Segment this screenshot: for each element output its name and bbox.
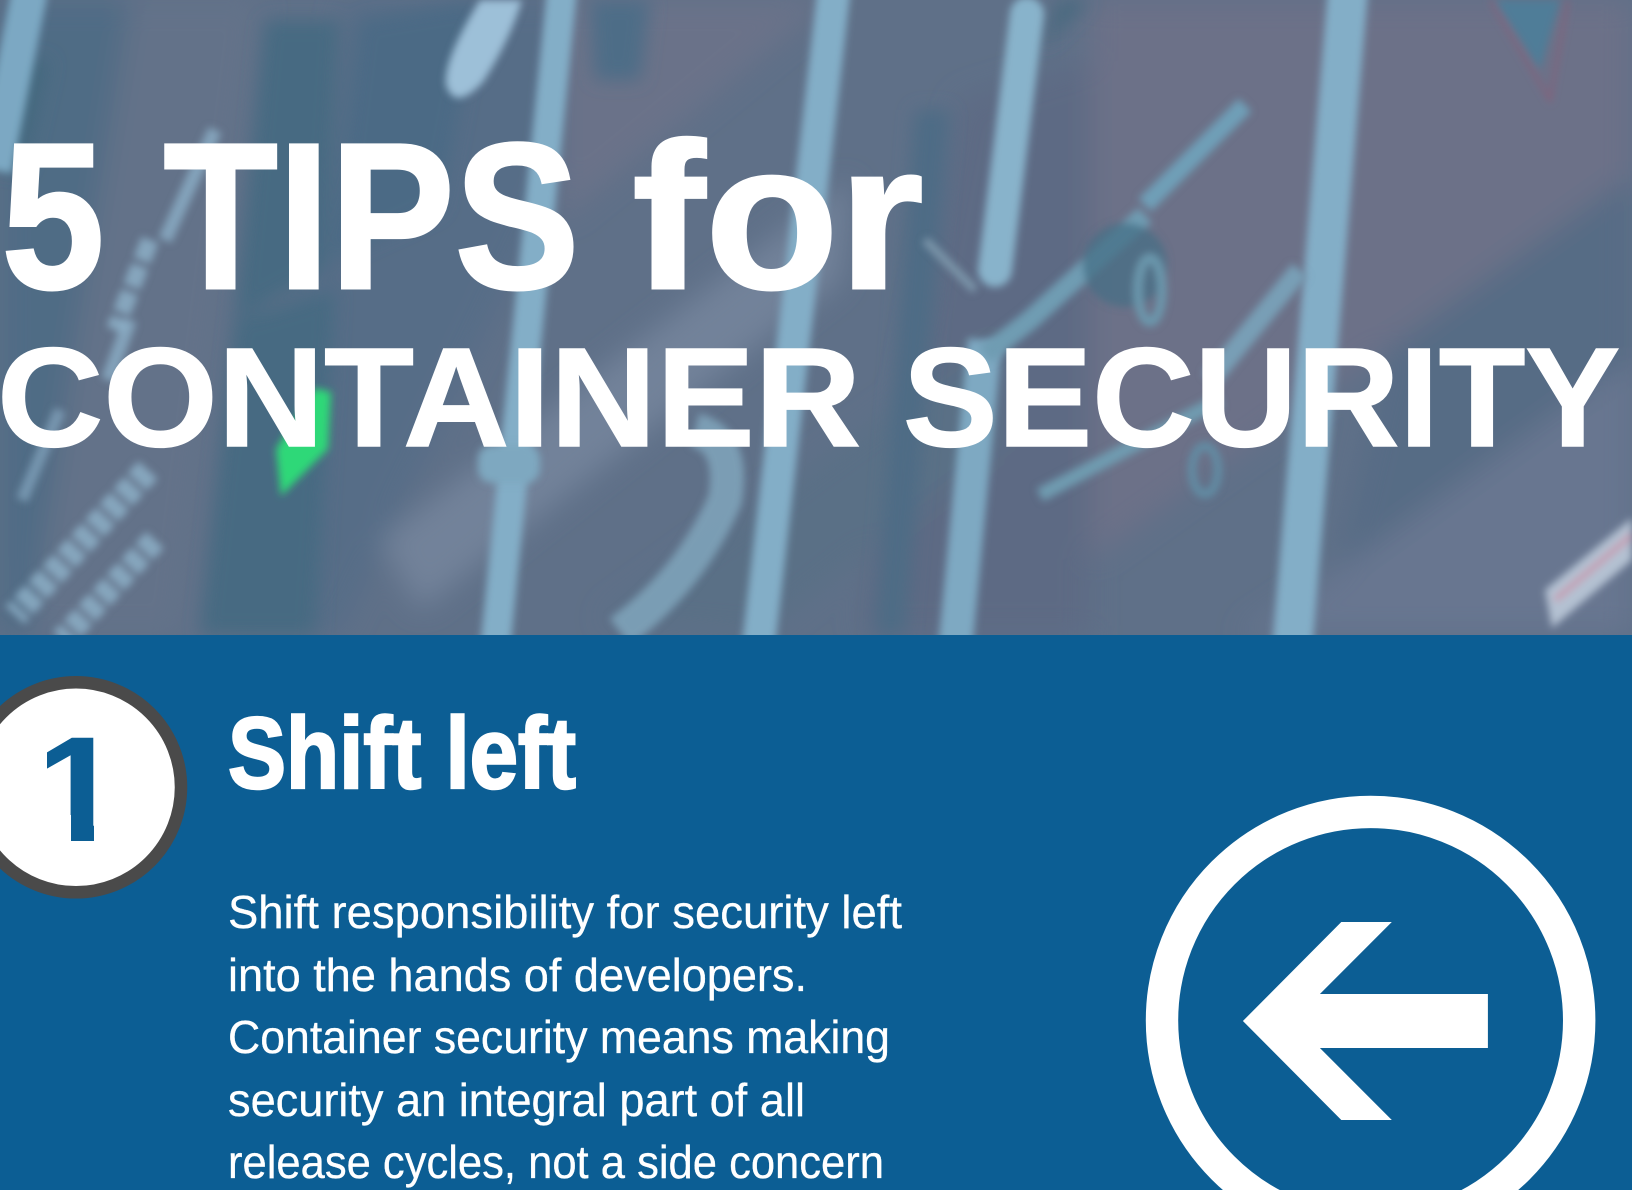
body text: Shift responsibility for security left — [228, 886, 902, 938]
green arrow marker — [276, 388, 331, 496]
body text — [228, 886, 902, 1188]
faded stencil markings — [15, 130, 215, 640]
body text: security an integral part of all — [228, 1074, 805, 1126]
red triangle sign — [1500, 0, 1568, 100]
heading: Shift left: Shift left — [228, 698, 576, 810]
title line: 5 TIPS for: TIPS — [164, 101, 580, 333]
hero photo: shipping containers with blue tint — [0, 0, 1632, 650]
vertical pipes and lock rods — [0, 0, 1348, 650]
body text: release cycles, not a side concern — [228, 1136, 884, 1188]
subtitle line: CONTAINER SECURITY: CONTAINER — [0, 318, 861, 476]
dark container panels — [0, 0, 1090, 635]
subtitle line: CONTAINER SECURITY — [0, 318, 1620, 476]
title — [0, 101, 1620, 476]
icon: left arrow in circle — [1162, 812, 1579, 1190]
body text: into the hands of developers. — [228, 949, 807, 1001]
number badge 1 — [0, 682, 181, 892]
title line: 5 TIPS for: for — [632, 101, 924, 333]
subtitle line: CONTAINER SECURITY: SECURITY — [903, 318, 1620, 476]
body text: Container security means making — [228, 1011, 890, 1063]
numeral: 1 — [32, 705, 124, 873]
title line: 5 TIPS for — [2, 101, 924, 333]
title line: 5 TIPS for: 5 — [2, 101, 104, 333]
lock rod handles and chains — [446, 0, 1300, 632]
blue panel: tip 1 — [0, 635, 1632, 1190]
white sticker — [1545, 518, 1632, 628]
